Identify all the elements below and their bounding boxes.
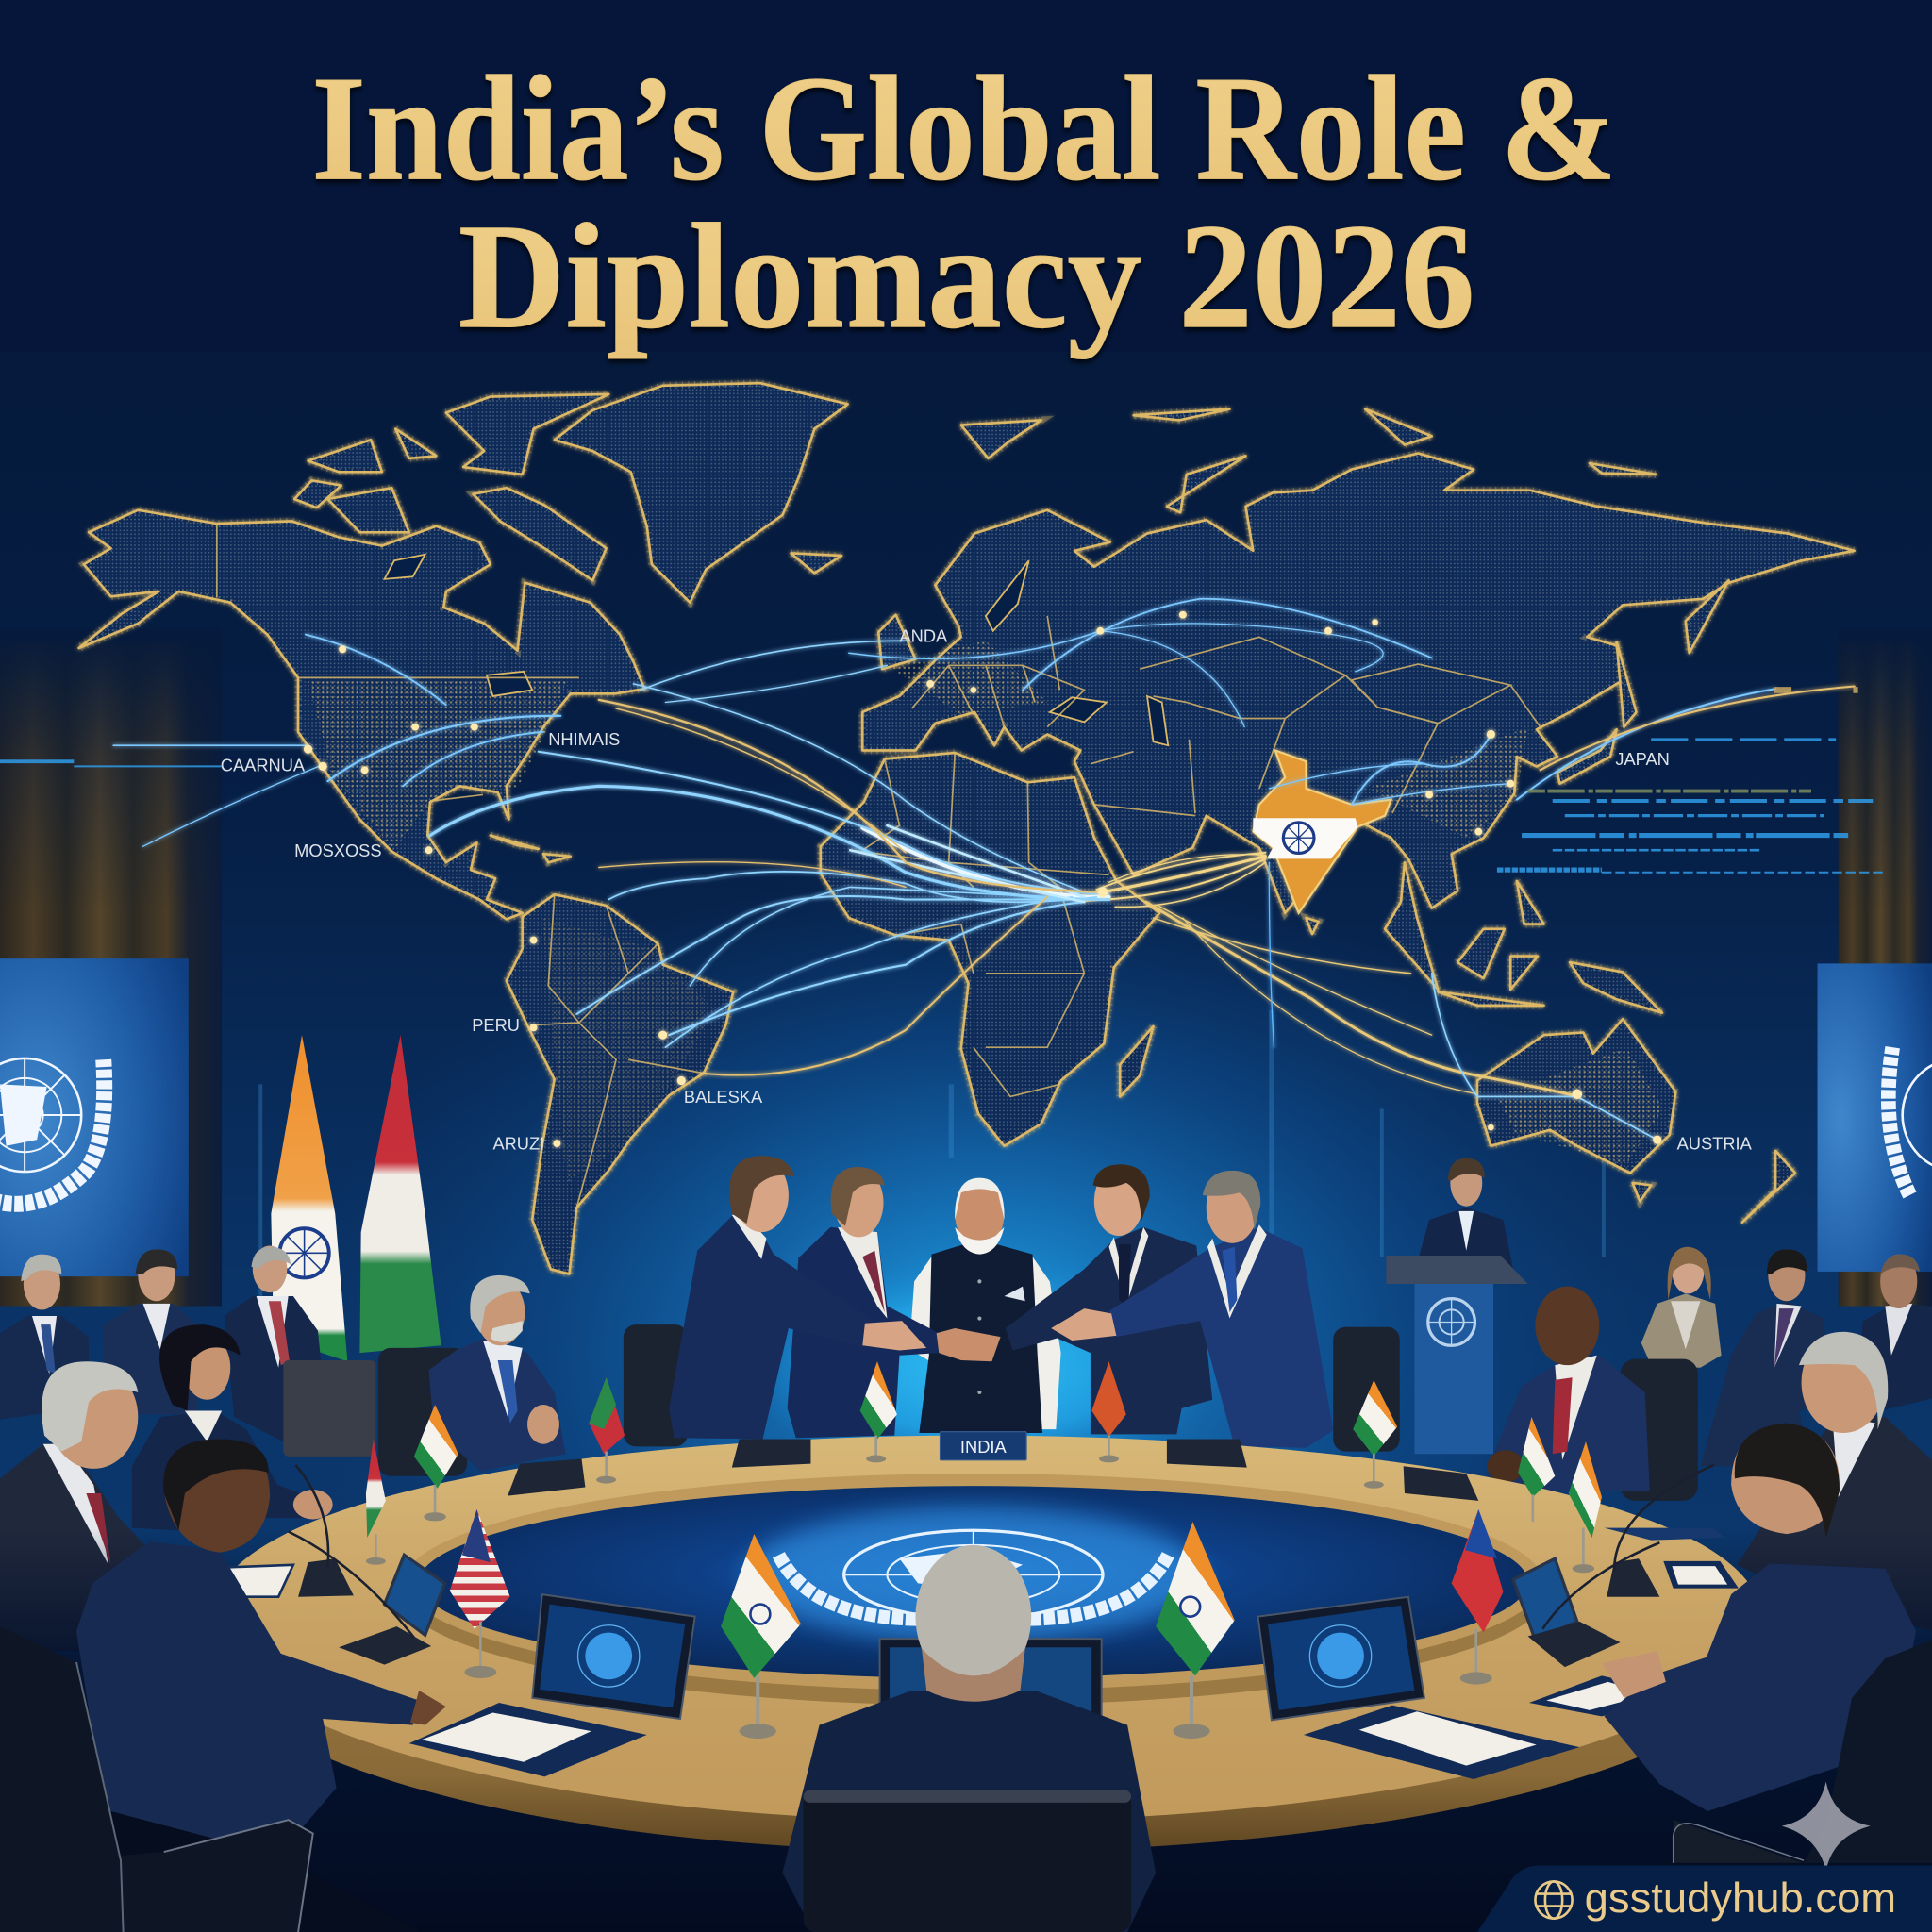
- map labels: MOSXOSS: [294, 841, 382, 860]
- website address: gsstudyhub.com: [1585, 1875, 1896, 1922]
- foreground delegate right: [1602, 1424, 1916, 1811]
- seated delegate dark suit right: [1486, 1287, 1650, 1491]
- map labels: AUSTRIA: [1677, 1134, 1753, 1154]
- India highlighted: [1253, 750, 1391, 913]
- foreground chair right: [1674, 1640, 1932, 1863]
- map labels: PERU: [472, 1015, 520, 1035]
- microphones: [289, 1465, 1714, 1667]
- title: [311, 45, 1617, 359]
- tablet right: [1258, 1597, 1424, 1720]
- document folders: [217, 1528, 1739, 1779]
- website footer tag: [1477, 1865, 1932, 1932]
- map labels: JAPAN: [1615, 749, 1670, 769]
- floor shadow: [0, 1528, 1932, 1932]
- gold bundle to North America: [599, 700, 1096, 1075]
- USA flag: [450, 1509, 510, 1678]
- title: India’s Global Role &: [311, 45, 1617, 211]
- UN emblem right: [1889, 1047, 1932, 1195]
- back row audience left: [0, 1245, 323, 1448]
- right UN screen: [1818, 963, 1932, 1272]
- back chairs: [378, 1324, 1698, 1501]
- map labels: ANDA: [899, 625, 948, 645]
- blue bundle Africa to Americas: [430, 641, 1109, 1047]
- Chile flag: [1452, 1509, 1503, 1684]
- title: Diplomacy 2026: [458, 193, 1474, 359]
- map labels: NHIMAIS: [548, 729, 620, 749]
- small flags row: [366, 1361, 1602, 1573]
- icon: globe: [1535, 1881, 1573, 1919]
- India flag table right: [1156, 1522, 1235, 1739]
- India stage flag: [271, 1035, 347, 1361]
- seated delegate woman: [132, 1324, 333, 1532]
- UN emblem left: [0, 1058, 105, 1204]
- seated delegate grey hair left: [0, 1361, 154, 1651]
- glow behind leaders: [745, 1257, 1214, 1478]
- back grey chair: [283, 1360, 375, 1457]
- table tablets: [385, 1555, 1577, 1725]
- seated delegate left: [429, 1275, 566, 1472]
- leader two: [788, 1167, 1001, 1438]
- golden bundle India to Africa: [1084, 853, 1265, 907]
- small and table flags: [366, 1361, 1602, 1739]
- country borders: [217, 524, 1541, 1208]
- tablet far right: [1513, 1558, 1577, 1640]
- INDIA nameplate: [941, 1432, 1026, 1460]
- UN floor emblem: [745, 1507, 1201, 1642]
- back row audience right: [1641, 1247, 1932, 1466]
- arcs across Eurasia: [849, 599, 1855, 805]
- desk name plates: [508, 1440, 1478, 1501]
- five leaders handshake: [669, 1156, 1333, 1448]
- title band background: [0, 0, 1932, 351]
- world map: [0, 383, 1885, 1274]
- tablet centre: [880, 1639, 1102, 1725]
- tricolour stage flag: [359, 1035, 441, 1353]
- Modi centre figure: [909, 1178, 1061, 1433]
- table well: [399, 1474, 1547, 1706]
- foreground delegate left: [76, 1440, 446, 1860]
- INDIA nameplate: INDIA: [960, 1437, 1007, 1457]
- inland seas: [385, 555, 1168, 745]
- data streaks: [0, 690, 1885, 873]
- leader five: [1051, 1171, 1333, 1448]
- map labels: CAARNUA: [221, 756, 306, 775]
- left curtains: [0, 628, 222, 1306]
- foreground chair left: [0, 1626, 313, 1932]
- connection arcs: [113, 599, 1855, 1140]
- tablet left: [532, 1594, 695, 1719]
- India flag table left: [721, 1534, 801, 1739]
- podium emblem: [1428, 1299, 1474, 1345]
- presenter at podium: [1420, 1158, 1513, 1269]
- left UN screen: [0, 958, 189, 1276]
- podium: [1386, 1256, 1528, 1454]
- map labels: ARUZI: [492, 1134, 544, 1154]
- leader one: [669, 1156, 926, 1440]
- right curtains: [1839, 628, 1932, 1306]
- map labels: [221, 625, 1753, 1154]
- arcs across North America: [113, 635, 560, 846]
- foreground lower body left: [74, 1811, 419, 1932]
- arcs to Australia: [1146, 862, 1657, 1140]
- gold city speckle: [308, 641, 1663, 1183]
- city lights: [304, 611, 1661, 1147]
- continents: [79, 383, 1855, 1274]
- conference table: [209, 1436, 1762, 1852]
- map labels: BALESKA: [684, 1087, 763, 1107]
- sparkle watermark: [1782, 1782, 1871, 1871]
- tablet far left: [385, 1555, 445, 1635]
- seated delegate grey hair right: [1738, 1332, 1932, 1631]
- foreground back-of-head delegate: [782, 1545, 1156, 1932]
- foreground chair back: [804, 1790, 1131, 1932]
- leader four: [1006, 1164, 1212, 1434]
